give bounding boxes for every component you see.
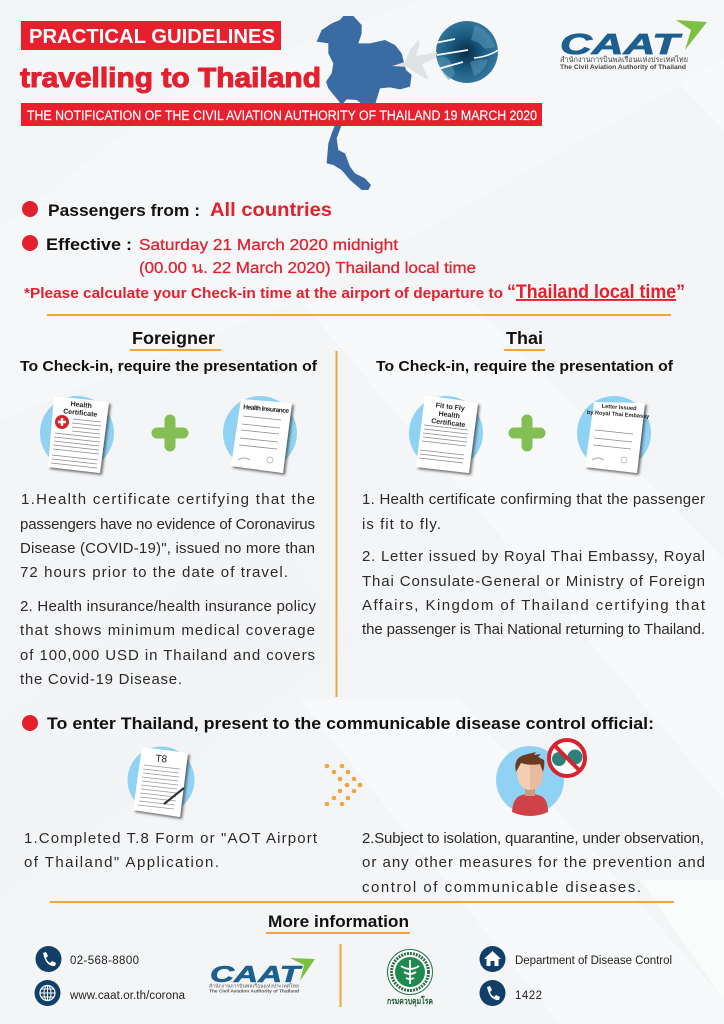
- text: thai requirements: is fit to fly.: [362, 516, 441, 533]
- check-in time note: *Please calculate your Check-in time at the airport of departure to: [24, 286, 503, 302]
- panel: thai: [362, 328, 706, 638]
- text: T8 form: [24, 830, 318, 871]
- contact: CAAT web: www.caat.or.th/corona: [69, 990, 186, 1002]
- logo: CAAT: สำนักงานการบินพลเรือนแห่งประเทศไทย: [560, 55, 688, 64]
- logo: Ministry of Public Health: กรมควบคุมโรค: [387, 995, 433, 1007]
- contact: CAAT web: [34, 980, 186, 1006]
- icon: fit to fly certificate: Health: [438, 411, 460, 420]
- icon: health certificate: [40, 396, 114, 473]
- effective date: (00.00 น. 22 March 2020) Thailand local time: [139, 260, 476, 277]
- logo: CAAT small: The Civil Aviation Authority of Thailand: [209, 988, 299, 994]
- icon: health certificate: Health: [70, 401, 92, 410]
- text: isolation: control of communicable diseases.: [362, 879, 641, 896]
- check-in time note: “Thailand local time”: [507, 282, 685, 303]
- text: foreigner requirements: 2. Health insurance/health insurance policy: [20, 598, 316, 615]
- title: travelling to Thailand: travelling to Thailand: [20, 62, 321, 93]
- text: thai requirements: 2. Letter issued by Royal Thai Embassy, Royal: [362, 548, 705, 565]
- text: T8 form: of Thailand" Application.: [24, 854, 219, 871]
- contact: CAAT phone: [36, 946, 139, 972]
- panel: foreigner: [20, 328, 318, 688]
- effective date: [22, 235, 476, 277]
- effective date: Effective :: [46, 235, 132, 254]
- icon: globe with plane: [392, 21, 500, 83]
- text: thai requirements: Thai Consulate-General or Ministry of Foreign: [362, 573, 705, 590]
- icon: Thailand map: [317, 16, 412, 190]
- text: foreigner requirements: of 100,000 USD in Thailand and covers: [20, 647, 315, 664]
- icon: health insurance: [223, 396, 297, 473]
- text: isolation: or any other measures for the prevention and: [362, 854, 705, 871]
- text: foreigner requirements: 1.Health certificate certifying that the: [21, 491, 315, 508]
- icon: T8 form: T8: [155, 754, 168, 766]
- icon: embassy letter: [577, 396, 651, 473]
- text: foreigner requirements: 72 hours prior to the date of travel.: [20, 564, 288, 581]
- text: foreigner requirements: that shows minimum medical coverage: [20, 622, 315, 639]
- passengers line: [22, 199, 332, 221]
- contact: department: [480, 946, 672, 972]
- heading: Foreigner: Foreigner: [132, 328, 215, 348]
- text: foreigner requirements: passengers have no evidence of Coronavirus: [20, 516, 315, 533]
- check-in time note: [24, 282, 685, 303]
- logo: CAAT: CAAT: [560, 29, 682, 61]
- subheading: To Check-in, require the presentation of: [20, 358, 318, 375]
- icon: arrow dots: [325, 764, 362, 806]
- text: foreigner requirements: [20, 491, 316, 688]
- icon: plus: [157, 420, 183, 446]
- logo: Ministry of Public Health: [387, 950, 433, 1007]
- icon: plus: [514, 420, 540, 446]
- icon: health insurance: Health Insurance: [243, 404, 290, 415]
- text: T8 form: 1.Completed T.8 Form or "AOT Airport: [24, 830, 318, 847]
- contact: CAAT phone: 02-568-8800: [70, 955, 139, 967]
- text: thai requirements: 1. Health certificate confirming that the passenger: [362, 491, 705, 508]
- text: thai requirements: Affairs, Kingdom of Thailand certifying that: [362, 597, 706, 614]
- contact: hotline: 1422: [515, 990, 542, 1002]
- icon: fit to fly certificate: Fit to Fly: [435, 402, 465, 413]
- icon: embassy letter: by Royal Thai Embassy: [587, 410, 650, 420]
- title: Practical Guidelines: PRACTICAL GUIDELINES: [29, 26, 275, 48]
- icon: person with no-virus sign: [496, 740, 585, 816]
- icon: T8 form: [128, 746, 194, 817]
- passengers line: All countries: [210, 199, 332, 221]
- subheading: To Check-in, require the presentation of: [376, 358, 674, 375]
- logo: CAAT small: CAAT: [210, 961, 303, 987]
- icon: fit to fly certificate: Certificate: [431, 418, 466, 429]
- subtitle banner: [21, 103, 542, 126]
- contact: hotline: [480, 980, 542, 1006]
- icon: fit to fly certificate: [409, 395, 483, 473]
- passengers line: Passengers from :: [48, 201, 200, 220]
- text: foreigner requirements: the Covid-19 Disease.: [20, 671, 182, 688]
- logo: CAAT: [560, 20, 707, 71]
- logo: CAAT: The Civil Aviation Authority of Thailand: [560, 64, 686, 71]
- subtitle banner: THE NOTIFICATION OF THE CIVIL AVIATION AUTHORITY OF THAILAND 19 MARCH 2020: [27, 108, 537, 123]
- heading: to enter Thailand: To enter Thailand, present to the communicable disease control official:: [47, 714, 654, 733]
- text: thai requirements: the passenger is Thai National returning to Thailand.: [362, 621, 705, 638]
- text: isolation: 2.Subject to isolation, quarantine, under observation,: [362, 830, 704, 847]
- heading: more information: More information: [268, 913, 409, 931]
- effective date: Saturday 21 March 2020 midnight: [139, 237, 399, 254]
- text: thai requirements: [362, 491, 706, 638]
- icon: health certificate: Certificate: [63, 408, 98, 419]
- logo: CAAT small: สำนักงานการบินพลเรือนแห่งประเทศไทย: [209, 982, 299, 990]
- text: isolation: [362, 830, 705, 896]
- contact: department: Department of Disease Control: [515, 955, 672, 967]
- logo: CAAT small: [209, 958, 315, 994]
- heading: Thai: Thai: [506, 328, 543, 348]
- text: foreigner requirements: Disease (COVID-19)", issued no more than: [20, 540, 315, 557]
- icon: embassy letter: Letter Issued: [601, 404, 637, 412]
